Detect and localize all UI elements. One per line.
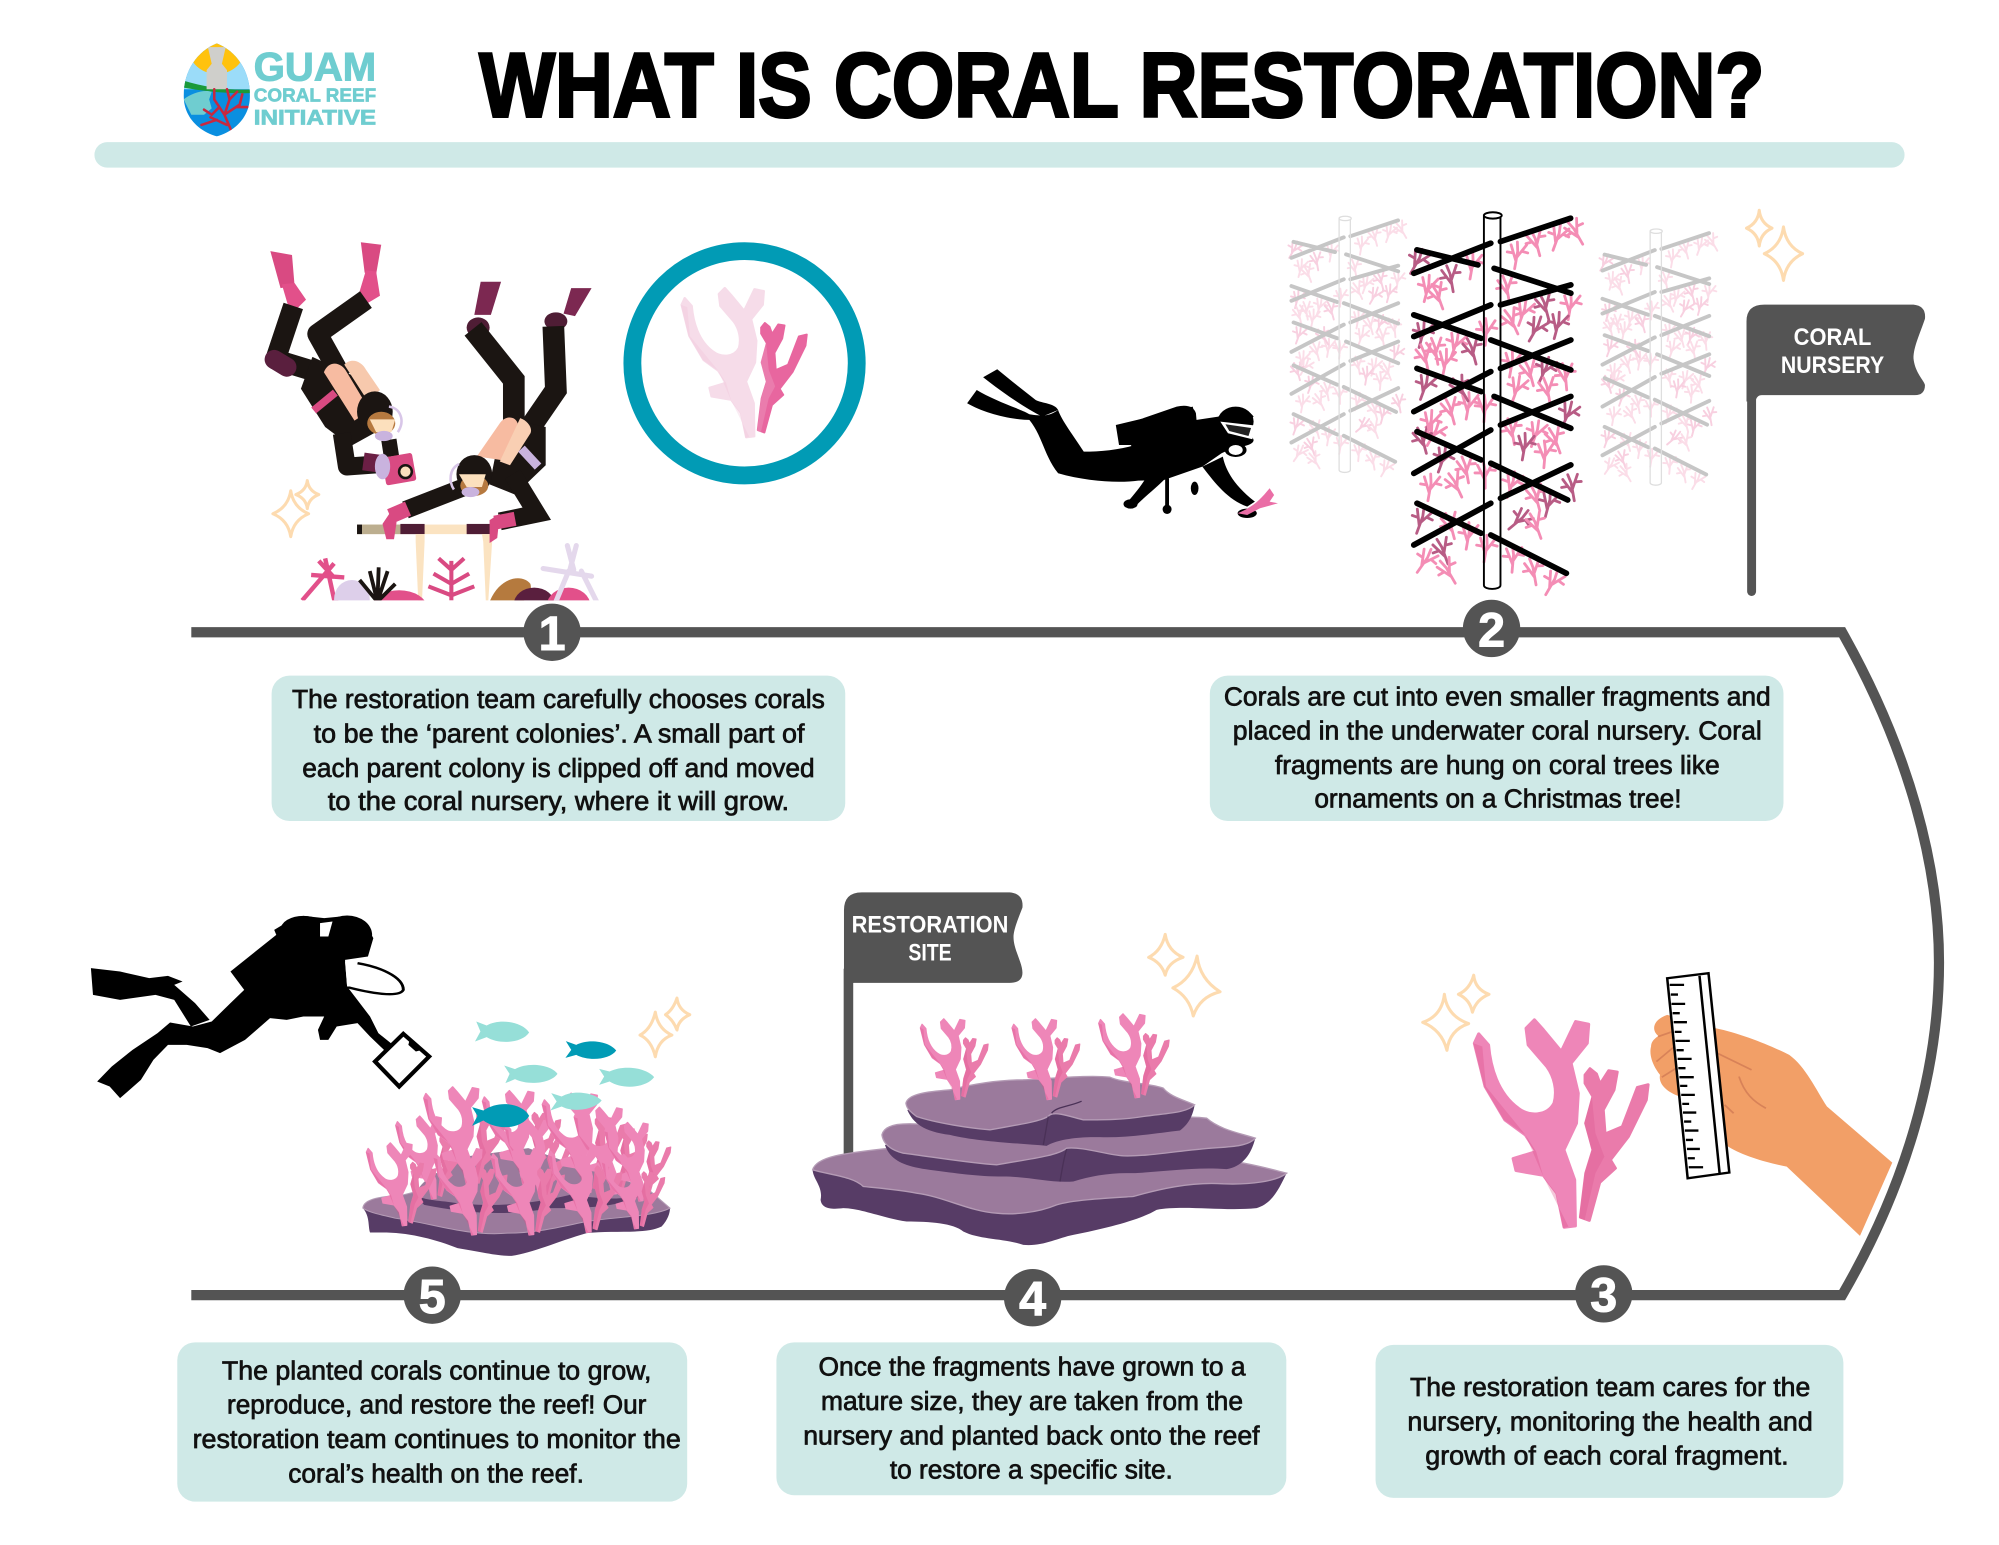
text block: step 5: coral’s health on the reef. bbox=[288, 1461, 584, 1489]
logo bbox=[184, 43, 376, 136]
step 1 illustration: two divers and parent colony bbox=[270, 242, 857, 626]
logo: GUAM bbox=[254, 45, 376, 89]
icon: reef rock bbox=[363, 1148, 670, 1256]
title: WHAT IS CORAL RESTORATION? bbox=[479, 36, 1764, 137]
timeline path bbox=[191, 632, 1939, 1295]
text block: step 4: mature size, they are taken from the bbox=[821, 1388, 1243, 1416]
text block: step 1: The restoration team carefully chooses corals bbox=[292, 686, 825, 714]
icon: coral fragment bbox=[1473, 1020, 1648, 1228]
text block: step 5: reproduce, and restore the reef! Our bbox=[227, 1392, 647, 1420]
text block: step 1: to the coral nursery, where it will grow. bbox=[328, 788, 789, 816]
step 2 illustration: coral nursery bbox=[967, 210, 1925, 600]
icon: sparkles bbox=[1149, 934, 1220, 1016]
icon: faded coral tree left bbox=[1283, 216, 1412, 480]
step marker 5: 5 bbox=[419, 1270, 446, 1324]
icon: diver with camera bbox=[270, 242, 417, 486]
text block: step 2: placed in the underwater coral nursery. Coral bbox=[1233, 717, 1762, 745]
text block: step 2: ornaments on a Christmas tree! bbox=[1314, 786, 1681, 814]
icon: faded coral tree right bbox=[1594, 229, 1723, 493]
panel: parent colony circle bbox=[632, 251, 857, 475]
text block: step 5 bbox=[177, 1342, 687, 1502]
icon: measuring frame bbox=[357, 512, 500, 600]
icon: diver with clipboard bbox=[91, 916, 429, 1098]
step 3 illustration: measuring coral bbox=[1423, 973, 1892, 1236]
step marker 4: 4 bbox=[1019, 1273, 1046, 1327]
step marker 4 bbox=[1004, 1269, 1061, 1327]
text block: step 2: Corals are cut into even smaller fragments and bbox=[1224, 684, 1771, 712]
step marker 2 bbox=[1463, 600, 1520, 657]
step marker 1 bbox=[523, 604, 581, 661]
text block: step 1: each parent colony is clipped off and moved bbox=[302, 755, 815, 783]
icon: seabed corals bbox=[300, 543, 599, 600]
text block: step 3 bbox=[1376, 1345, 1843, 1498]
logo: INITIATIVE bbox=[254, 104, 376, 129]
flag: coral nursery bbox=[1747, 305, 1925, 591]
icon: diver with tree bbox=[390, 282, 592, 523]
text block: step 1 bbox=[272, 676, 845, 821]
step marker 3 bbox=[1575, 1265, 1632, 1323]
logo: CORAL REEF bbox=[254, 84, 376, 105]
flag: restoration site: RESTORATION bbox=[852, 911, 1008, 938]
text block: step 3: growth of each coral fragment. bbox=[1425, 1443, 1789, 1471]
icon: planted corals bbox=[920, 1014, 1169, 1100]
icon: hand with ruler bbox=[1650, 973, 1892, 1236]
step marker 5 bbox=[404, 1266, 461, 1324]
step 4 illustration: restoration site bbox=[813, 892, 1287, 1245]
header band bbox=[94, 142, 1905, 168]
flag: restoration site bbox=[844, 892, 1023, 1154]
step 5 illustration: monitoring the reef bbox=[91, 916, 690, 1256]
icon: sparkles bbox=[1423, 975, 1489, 1050]
icon: sparkles bbox=[273, 481, 319, 537]
step marker 3: 3 bbox=[1590, 1269, 1617, 1323]
text block: step 3: The restoration team cares for the bbox=[1410, 1374, 1810, 1402]
text block: step 3: nursery, monitoring the health and bbox=[1407, 1408, 1813, 1436]
icon: sparkles bbox=[1747, 210, 1803, 280]
text block: step 1: to be the ‘parent colonies’. A small part of bbox=[314, 721, 805, 749]
text block: step 5: restoration team continues to monitor the bbox=[193, 1426, 681, 1454]
flag: restoration site: SITE bbox=[908, 940, 952, 967]
icon: sparkles bbox=[640, 998, 690, 1057]
icon: fish school bbox=[472, 1022, 654, 1127]
text block: step 4: Once the fragments have grown to a bbox=[818, 1353, 1246, 1381]
text block: step 5: The planted corals continue to grow, bbox=[222, 1357, 651, 1385]
icon: coral cluster bbox=[366, 1087, 671, 1235]
text block: step 4 bbox=[776, 1342, 1286, 1495]
text block: step 4: nursery and planted back onto the reef bbox=[803, 1422, 1261, 1450]
icon: diver with coral fragment bbox=[967, 369, 1278, 518]
text block: step 2: fragments are hung on coral trees like bbox=[1275, 752, 1720, 780]
icon: tiered reef rock bbox=[813, 1076, 1287, 1245]
text block: step 4: to restore a specific site. bbox=[890, 1457, 1173, 1485]
flag: coral nursery: NURSERY bbox=[1781, 352, 1884, 379]
step marker 1: 1 bbox=[539, 607, 566, 661]
flag: coral nursery: CORAL bbox=[1794, 324, 1872, 351]
step marker 2: 2 bbox=[1478, 603, 1505, 657]
icon: main coral tree bbox=[1402, 212, 1592, 600]
text block: step 2 bbox=[1210, 676, 1783, 821]
